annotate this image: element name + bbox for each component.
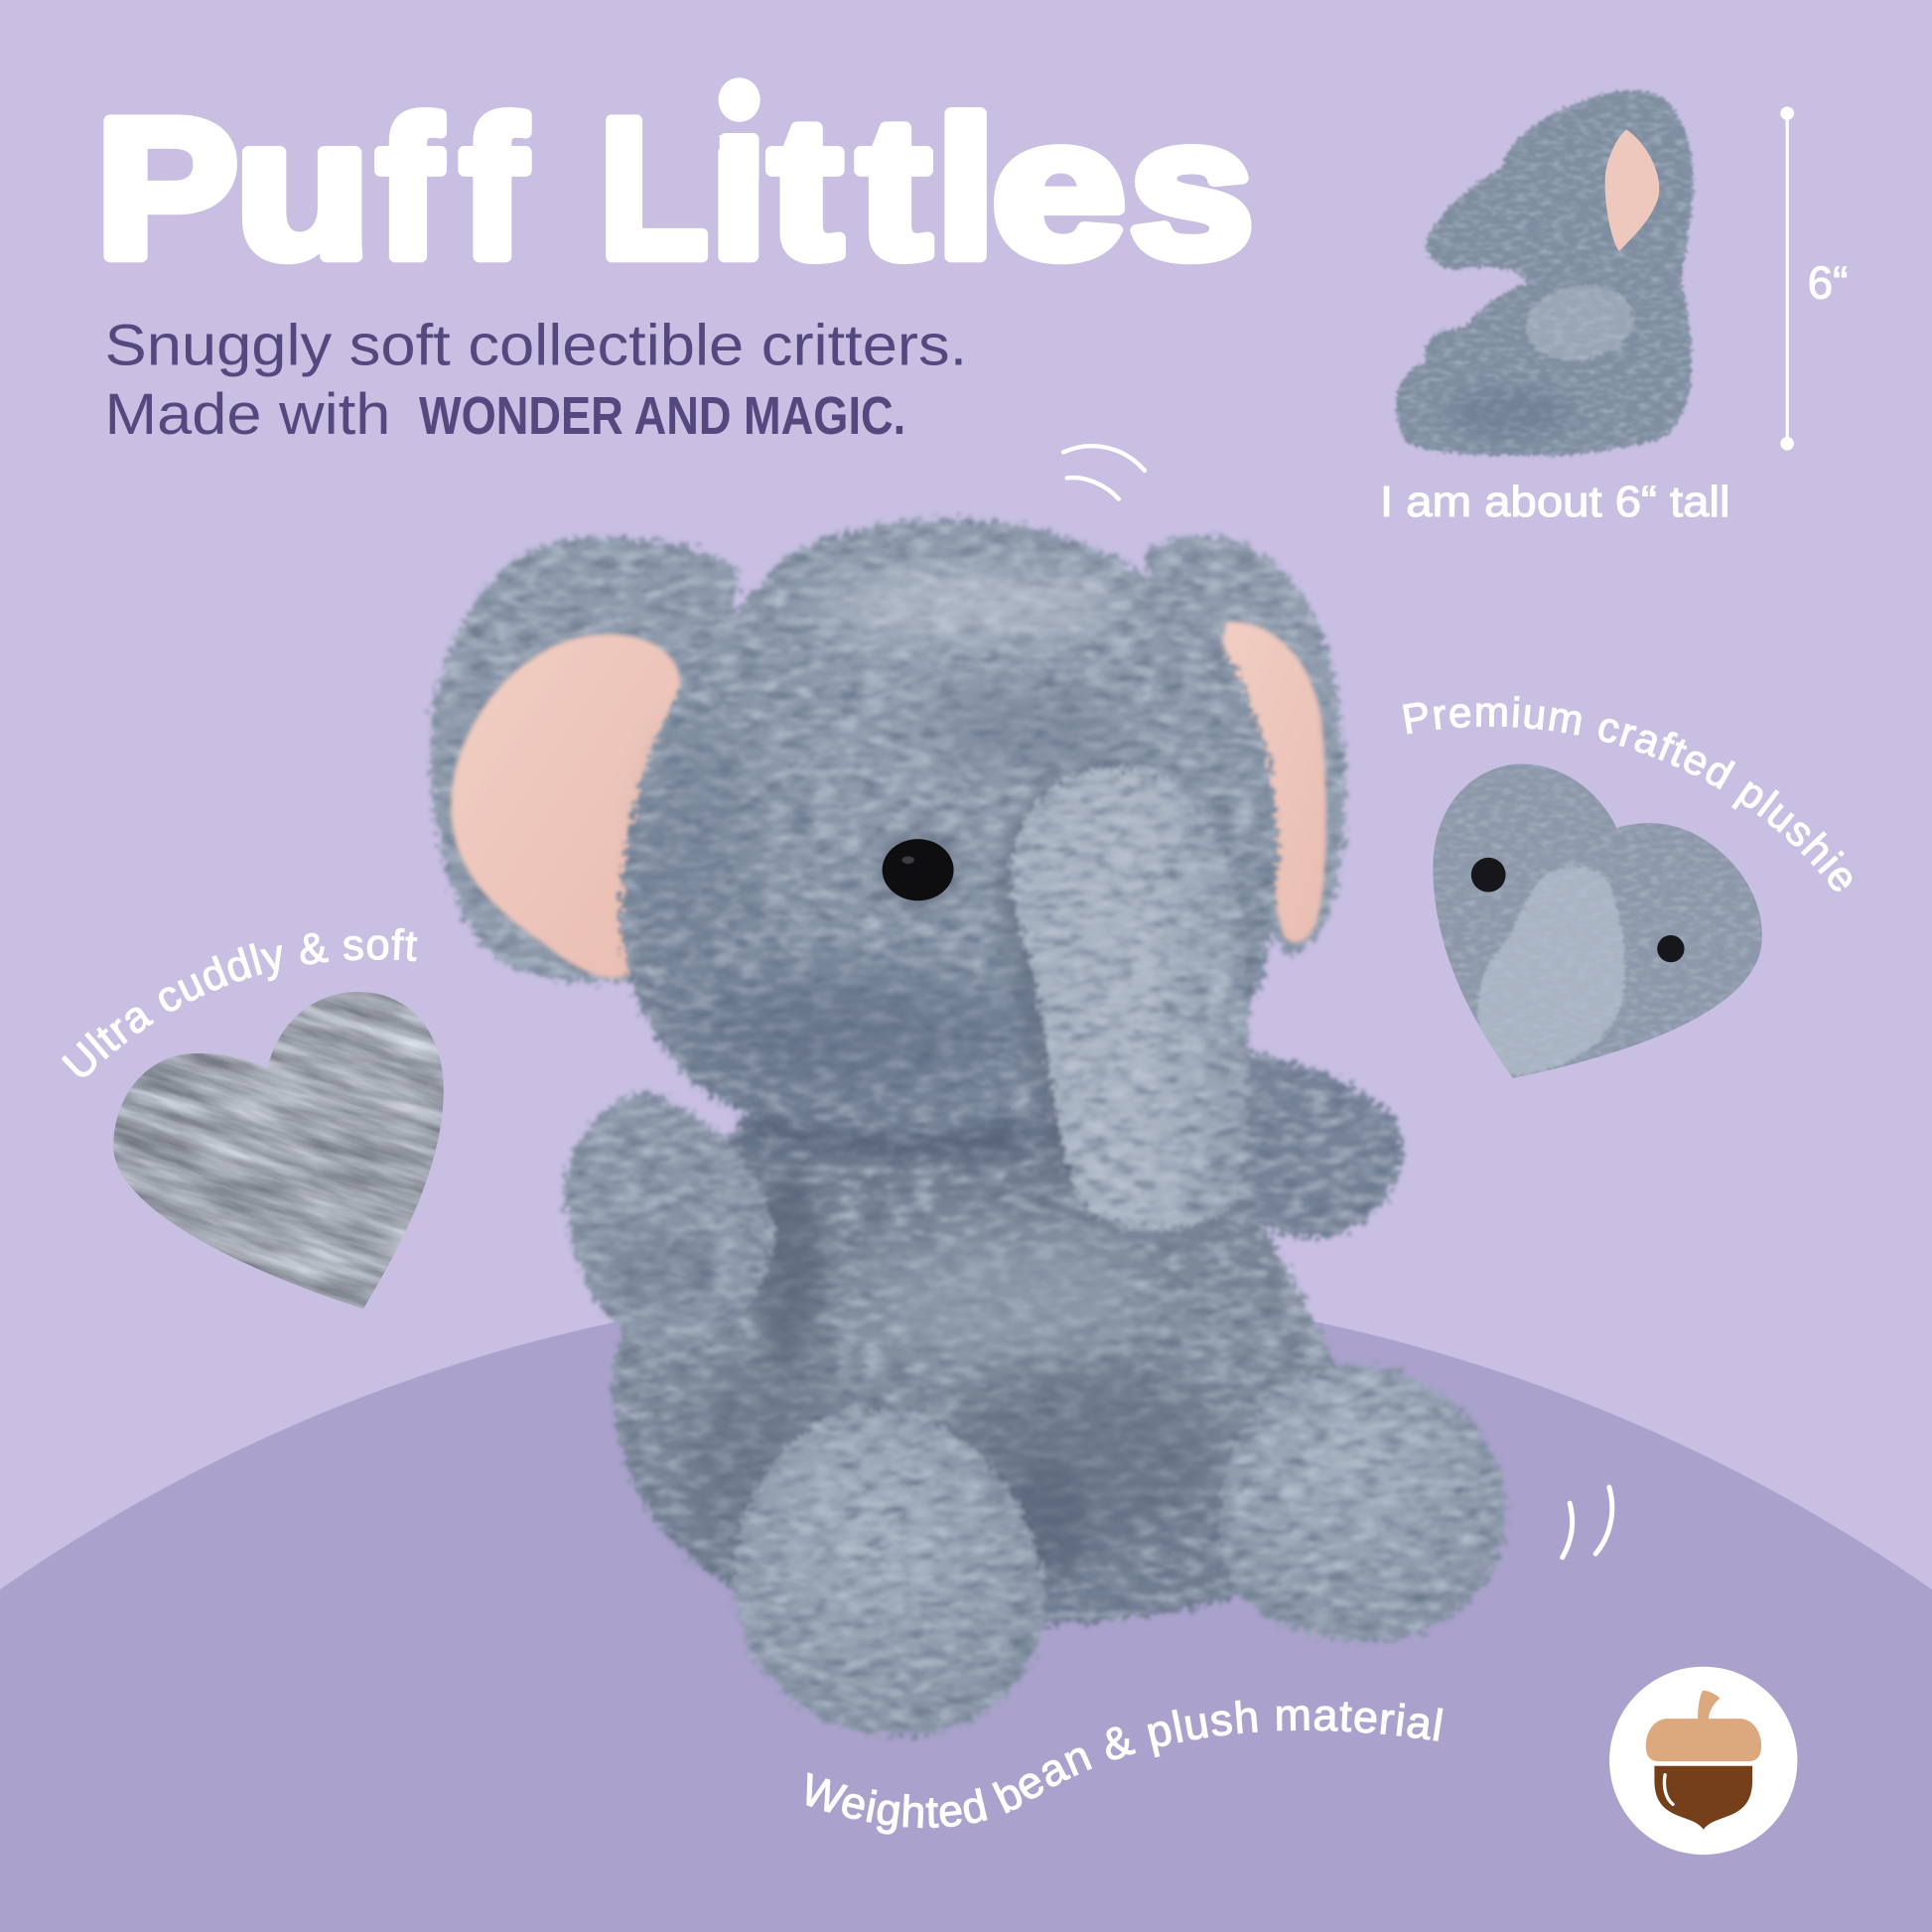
acorn highlight [1664, 1775, 1673, 1804]
height scale [1780, 106, 1848, 451]
label: ultra cuddly: Ultra cuddly & soft [62, 927, 417, 1077]
title: t [769, 78, 842, 299]
title: t [858, 78, 930, 299]
acorn cap [1646, 1719, 1761, 1761]
trunk [1012, 767, 1248, 1227]
right arm [1220, 1047, 1402, 1238]
head shading [653, 574, 1134, 1159]
left foot [733, 1411, 1045, 1735]
motion lines top [1063, 446, 1145, 499]
left foot shadow [1011, 1460, 1084, 1584]
heart: ultra cuddly fabric [113, 992, 444, 1309]
head [621, 520, 1277, 1133]
subtitle: WONDER AND MAGIC. [419, 387, 905, 446]
trunk shadow [997, 761, 1146, 1207]
title: s [1129, 78, 1254, 299]
left arm paw shading [604, 1226, 715, 1312]
subtitle: Made with [104, 382, 390, 447]
title: f [377, 78, 442, 299]
title: e [992, 78, 1126, 299]
hill [0, 1286, 1932, 1932]
heart eye right [1657, 935, 1685, 962]
height value: 6“ [1808, 256, 1848, 308]
title [96, 77, 1254, 299]
title: P [96, 78, 238, 299]
title: l [936, 78, 995, 299]
eye [879, 830, 957, 909]
body [614, 1100, 1340, 1625]
acorn nut [1654, 1766, 1752, 1830]
title: i [710, 78, 766, 299]
small elephant side view [1396, 90, 1693, 456]
small elephant ear [1605, 129, 1659, 251]
title: u [235, 78, 370, 299]
height caption: I am about 6“ tall [1380, 479, 1729, 526]
title: rounded i dot [715, 77, 765, 183]
label: weighted bean: Weighted bean & plush material [806, 1700, 1444, 1835]
title: L [600, 78, 708, 299]
title: f [461, 78, 526, 299]
subtitle [104, 313, 967, 447]
left arm [564, 1093, 773, 1349]
body shading [678, 1171, 1220, 1553]
icon: acorn badge [1609, 1667, 1797, 1855]
motion lines right [1563, 1487, 1612, 1558]
acorn stem [1698, 1691, 1720, 1720]
small elephant arm [1520, 277, 1639, 368]
small elephant belly shadow [1448, 388, 1571, 438]
left ear [431, 538, 740, 982]
main elephant plush [431, 520, 1506, 1735]
heart: premium plushie face [1434, 764, 1762, 1078]
label: premium crafted: Premium crafted plushie [1402, 696, 1853, 892]
right foot [1219, 1365, 1506, 1641]
subtitle: Snuggly soft collectible critters. [104, 313, 967, 377]
right ear [1146, 536, 1344, 955]
heart eye left [1471, 858, 1506, 893]
